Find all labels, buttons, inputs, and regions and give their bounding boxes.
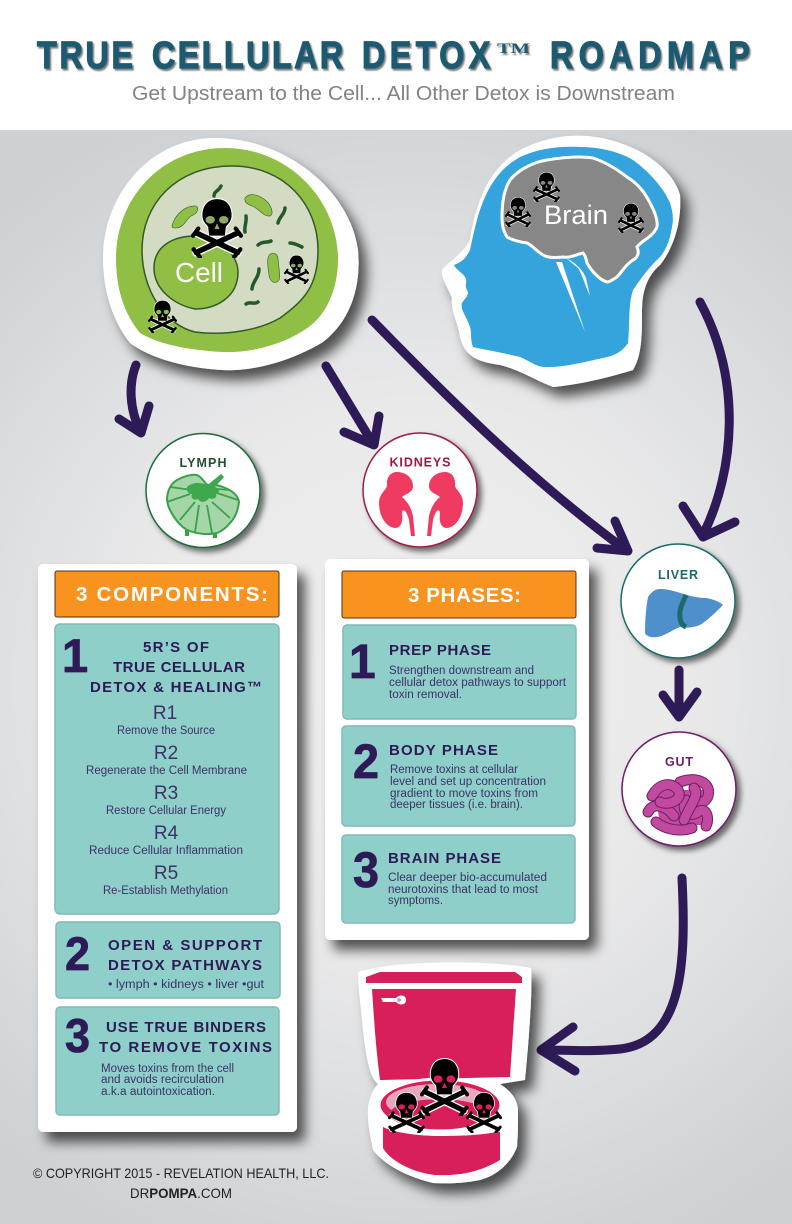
body phase: 2	[353, 736, 379, 789]
icon: kidneys	[379, 472, 463, 536]
nucleus	[154, 236, 238, 309]
component 3: and avoids recirculation	[101, 1074, 224, 1086]
component 1: Regenerate the Cell Membrane	[86, 765, 247, 777]
brain head illustration	[442, 136, 680, 387]
component 3: TO REMOVE TOXINS	[99, 1039, 272, 1056]
panel: 3 components	[38, 564, 297, 1132]
brain phase: neurotoxins that lead to most	[388, 884, 539, 896]
brain phase: symptoms.	[388, 895, 443, 907]
subtitle: Get Upstream to the Cell... All Other Detox is Downstream	[132, 83, 675, 105]
component 1: TRUE CELLULAR	[113, 659, 245, 676]
heading bar: 3 PHASES:	[408, 584, 521, 607]
bowl inner	[386, 1084, 490, 1120]
organelles	[172, 195, 280, 282]
component 1: 5R’S OF	[143, 639, 209, 656]
component 2: 2	[65, 927, 90, 980]
component 1: Re-Establish Methylation	[103, 885, 228, 897]
gut label: GUT	[665, 755, 693, 769]
prep phase	[343, 625, 576, 719]
footer copyright: DRPOMPA.COM	[130, 1185, 232, 1201]
icon: skull center	[422, 1059, 467, 1115]
heading bar: 3 COMPONENTS:	[76, 583, 268, 606]
component 1: R2	[154, 743, 178, 764]
component 3: a.k.a autointoxication.	[101, 1086, 215, 1098]
brain phase: 3	[353, 842, 379, 898]
brain stem	[556, 259, 590, 332]
title: CELLULAR	[152, 35, 343, 77]
icon: gut	[648, 780, 709, 830]
bowl body	[383, 1127, 500, 1175]
lymph disc	[146, 434, 260, 548]
small organelles	[214, 186, 302, 304]
component 3: Moves toxins from the cell	[101, 1063, 234, 1075]
prep phase: Strengthen downstream and	[389, 665, 534, 677]
brain label: Brain	[544, 200, 608, 230]
body phase	[342, 726, 575, 826]
component 1: 1	[62, 629, 88, 682]
cell white outline	[103, 138, 359, 370]
component 2: • lymph • kidneys • liver •gut	[108, 979, 265, 991]
component 1: R1	[153, 703, 177, 724]
lymph circle	[146, 434, 260, 548]
arrow: gut to toilet	[541, 878, 683, 1071]
component 3	[56, 1007, 279, 1115]
brain	[502, 157, 657, 282]
prep phase: PREP PHASE	[389, 642, 491, 659]
title: TM	[497, 41, 530, 57]
cell label: Cell	[175, 257, 223, 288]
panel: 3 phases	[325, 559, 589, 940]
body phase: level and set up concentration	[390, 776, 546, 788]
icon: skull large	[193, 199, 241, 257]
toilet illustration	[358, 962, 531, 1183]
icon: skull left	[506, 197, 530, 226]
head white outline	[442, 136, 680, 387]
component 1: DETOX & HEALING™	[90, 679, 262, 696]
brain phase	[342, 835, 575, 923]
icon: skull lower	[149, 300, 176, 332]
liver label: LIVER	[658, 568, 698, 582]
component 3: USE TRUE BINDERS	[106, 1019, 266, 1036]
prep phase: cellular detox pathways to support	[389, 677, 567, 689]
icon: lymph node	[167, 474, 239, 538]
title	[37, 35, 750, 77]
component 1: R4	[154, 823, 179, 844]
lymph label: LYMPH	[180, 456, 226, 470]
component 2: OPEN & SUPPORT	[108, 937, 262, 954]
component 3: 3	[65, 1009, 90, 1062]
icon: skull top	[534, 172, 559, 201]
gut circle	[622, 732, 736, 846]
cell illustration	[103, 138, 359, 370]
bowl water	[390, 1099, 488, 1122]
brain phase: BRAIN PHASE	[388, 850, 501, 867]
panel background	[38, 564, 297, 1132]
body phase: BODY PHASE	[389, 742, 498, 759]
gut disc	[622, 732, 736, 846]
icon: skull right	[285, 255, 308, 283]
kidneys label: KIDNEYS	[390, 456, 450, 470]
arrow: liver to gut	[663, 670, 697, 717]
component 1: Remove the Source	[117, 725, 215, 737]
cell wall	[116, 148, 338, 352]
title: TRUE	[37, 35, 133, 77]
icon: liver	[645, 589, 723, 637]
component 1: Reduce Cellular Inflammation	[89, 845, 243, 857]
liver circle	[621, 544, 735, 658]
component 1: Restore Cellular Energy	[106, 805, 226, 817]
arrows	[119, 302, 735, 1071]
footer copyright	[33, 1165, 329, 1201]
tank body	[372, 989, 516, 1080]
component 1: R5	[154, 863, 178, 884]
icon: skull right	[619, 203, 643, 232]
cytoplasm	[142, 166, 318, 333]
tank lid	[366, 972, 522, 983]
body phase: gradient to move toxins from	[390, 788, 538, 800]
arrow: cell to liver	[372, 320, 628, 551]
prep phase: toxin removal.	[389, 689, 462, 701]
heading bar	[55, 571, 279, 617]
component 1	[55, 624, 279, 914]
tank handle	[381, 996, 406, 1004]
kidneys circle	[363, 433, 477, 547]
body phase: Remove toxins at cellular	[390, 764, 518, 776]
icon: skull right	[467, 1092, 501, 1132]
prep phase: 1	[349, 636, 376, 689]
component 2	[56, 922, 280, 998]
title: ROADMAP	[550, 35, 750, 77]
heading bar	[342, 571, 576, 618]
component 1: R3	[154, 783, 178, 804]
component 2: DETOX PATHWAYS	[108, 957, 262, 974]
brain phase: Clear deeper bio-accumulated	[388, 872, 547, 884]
panel background	[325, 559, 589, 940]
arrow: cell to kidneys	[326, 366, 379, 445]
title: DETOX	[362, 35, 491, 77]
icon: skull left	[389, 1092, 424, 1132]
footer copyright: © COPYRIGHT 2015 - REVELATION HEALTH, LLC.	[33, 1165, 329, 1181]
body phase: deeper tissues (i.e. brain).	[390, 799, 523, 811]
toilet white outline	[358, 962, 531, 1183]
arrow: cell to lymph	[119, 365, 149, 433]
arrow: brain to liver	[683, 302, 735, 537]
bowl rim	[379, 1079, 501, 1131]
kidneys disc	[363, 433, 477, 547]
head silhouette	[454, 147, 673, 367]
liver disc	[621, 544, 735, 658]
